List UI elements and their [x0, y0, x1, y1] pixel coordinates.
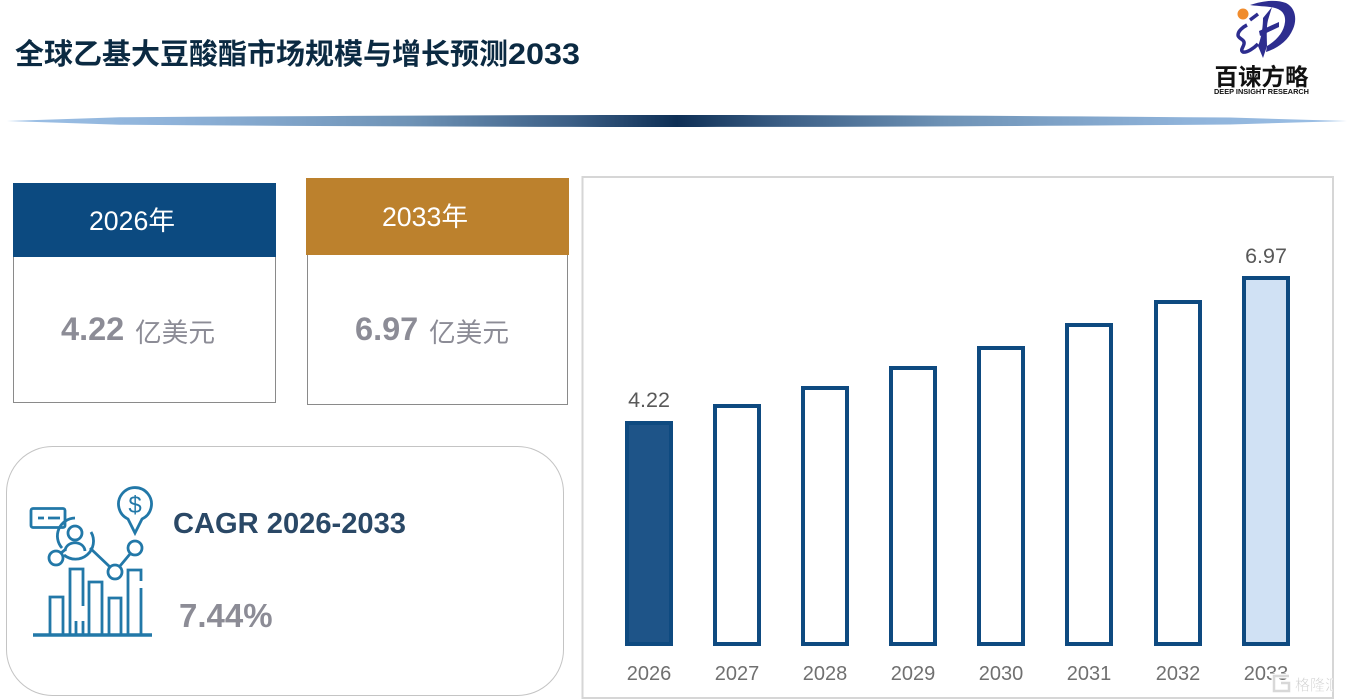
- card body: [308, 190, 568, 404]
- watermark text: 格隆汇: [1295, 677, 1340, 694]
- panel: 2033 value card: [306, 178, 569, 404]
- x axis labels: 2029: [891, 663, 935, 685]
- bar 2029: [891, 368, 935, 644]
- value 4.22: 4.22: [61, 311, 124, 347]
- header label: 2033年: [382, 202, 468, 232]
- icon: logo swoosh: [1238, 1, 1295, 58]
- CAGR label: CAGR 2026-2033: [173, 508, 406, 540]
- header gradient band: [7, 115, 1347, 127]
- x axis labels: 2033: [1244, 663, 1288, 685]
- title: 2033: [508, 38, 580, 71]
- card header 2026: [13, 183, 276, 257]
- watermark icon: [1272, 674, 1288, 680]
- bar 2027: [715, 406, 759, 644]
- x axis labels: 2026: [627, 663, 671, 685]
- card header 2033: [306, 178, 569, 255]
- value 6.97: 6.97: [355, 311, 418, 347]
- value 6.97: 6.97: [1245, 244, 1287, 268]
- x axis labels: 2031: [1067, 663, 1111, 685]
- icon: analytics chart with dollar pin: [31, 488, 152, 635]
- logo tagline: DEEP INSIGHT RESEARCH: [1214, 87, 1309, 96]
- card body: [14, 190, 276, 402]
- bar 2026: [627, 423, 671, 644]
- value labels: [628, 244, 1287, 412]
- header label: 2026年: [89, 206, 175, 236]
- unit: 亿美元: [135, 318, 215, 348]
- x axis labels: 2028: [803, 663, 847, 685]
- value 4.22: 4.22: [628, 388, 670, 412]
- bar 2030: [979, 348, 1023, 644]
- bar 2031: [1067, 325, 1111, 644]
- unit: 亿美元: [429, 318, 509, 348]
- bar 2033: [1244, 278, 1288, 644]
- x axis labels: 2027: [715, 663, 759, 685]
- watermark: [1274, 676, 1340, 694]
- panel: bar chart: [582, 177, 1333, 698]
- bar 2028: [803, 388, 847, 644]
- CAGR value: 7.44%: [179, 597, 273, 634]
- bar 2032: [1156, 302, 1200, 644]
- bars: [627, 278, 1288, 644]
- logo: [1214, 1, 1309, 96]
- logo name: 百谏方略: [1214, 63, 1309, 90]
- x axis labels: 2032: [1156, 663, 1200, 685]
- title: 全球乙基大豆酸酯市场规模与增长预测: [15, 38, 508, 71]
- x axis labels: 2030: [979, 663, 1023, 685]
- x axis labels: [627, 663, 1288, 685]
- icon: dollar sign: $: [128, 492, 142, 519]
- panel: CAGR: [6, 446, 564, 696]
- panel: 2026 value card: [13, 183, 276, 402]
- chart frame: [582, 177, 1333, 698]
- panel outline: [6, 446, 564, 696]
